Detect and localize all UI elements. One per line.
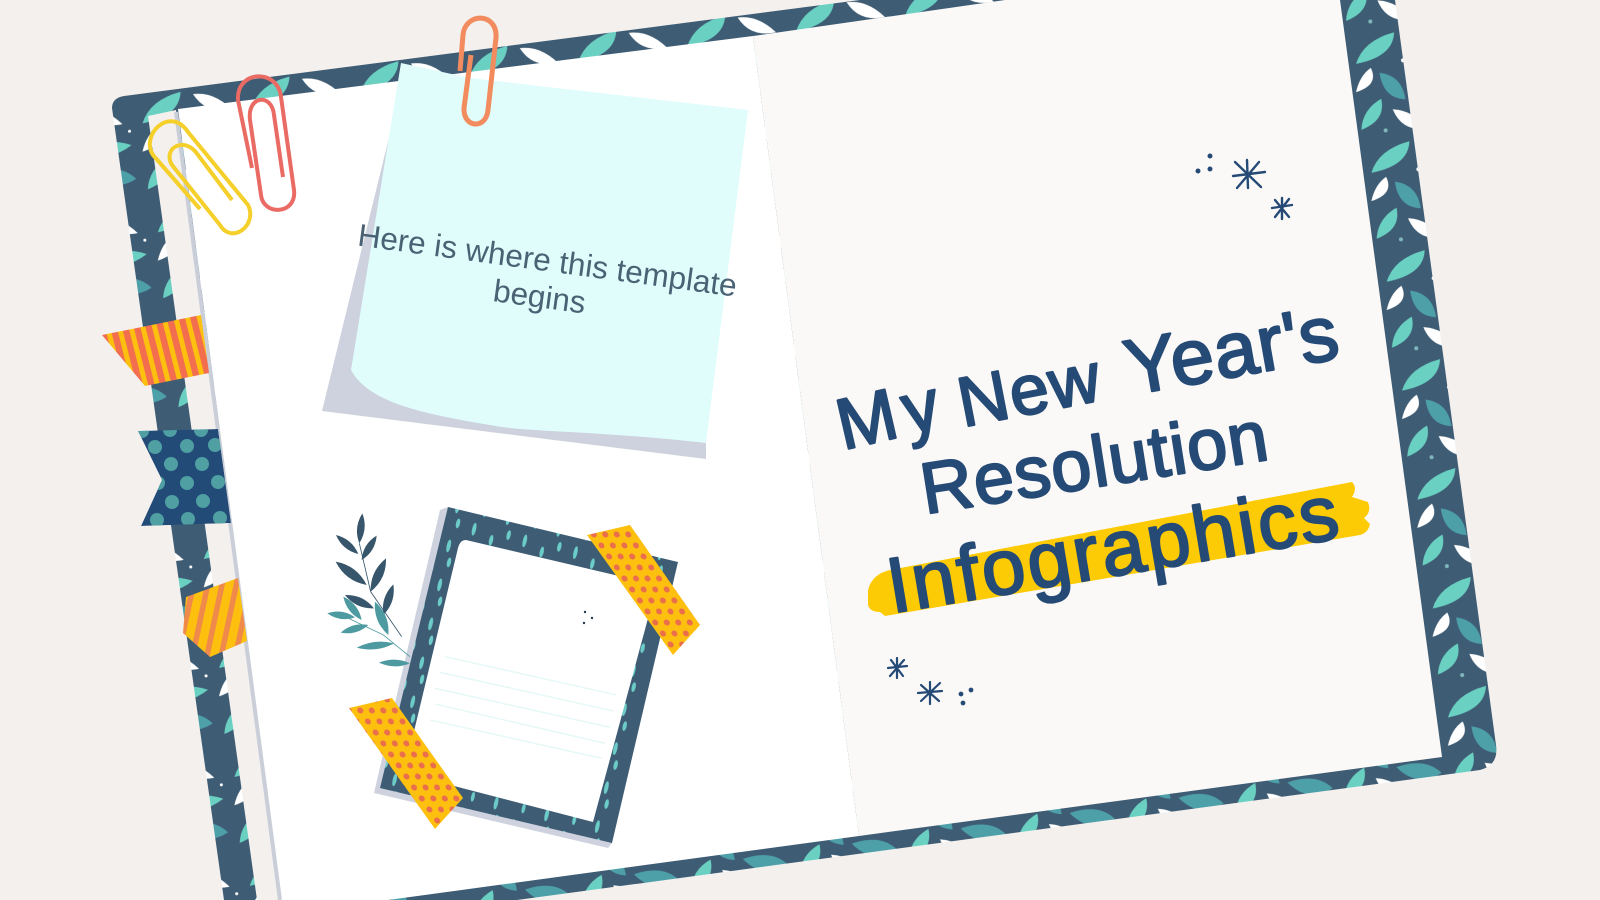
title: Resolution [915,396,1273,530]
inner gap beside left page [148,110,281,900]
note text [351,217,739,340]
sticky note [322,63,748,459]
sticky note paper [351,63,748,443]
tape: top right [587,525,700,655]
sticky note shadow [322,113,706,459]
paper clip: yellow [150,121,250,233]
paper clip: red [238,76,294,210]
title: Infographics [880,468,1345,630]
photo frame illustration [349,507,700,848]
ruled lines [430,657,617,758]
sparkles: top right [1197,155,1292,219]
tape: bottom left [349,698,463,829]
washi tape: yellow stripes [183,578,247,657]
title [829,288,1345,630]
right page [753,0,1442,836]
frame border [380,507,678,843]
note text: Here is where this template [356,217,739,304]
washi tape: orange stripes [102,315,209,386]
title: New [951,338,1107,442]
paper clip: orange [460,18,496,124]
title: Year's [1118,288,1345,412]
frame shadow [374,507,612,848]
yellow brush highlight [868,482,1370,616]
title: My [829,364,947,466]
washi tape: blue dots [135,423,231,527]
left page [178,36,859,900]
tiny dots [583,611,593,624]
left page edge [176,112,280,900]
plant sprig [327,513,410,666]
frame paper [404,540,657,822]
sparkles: bottom left [888,658,972,704]
note text: begins [491,272,588,320]
